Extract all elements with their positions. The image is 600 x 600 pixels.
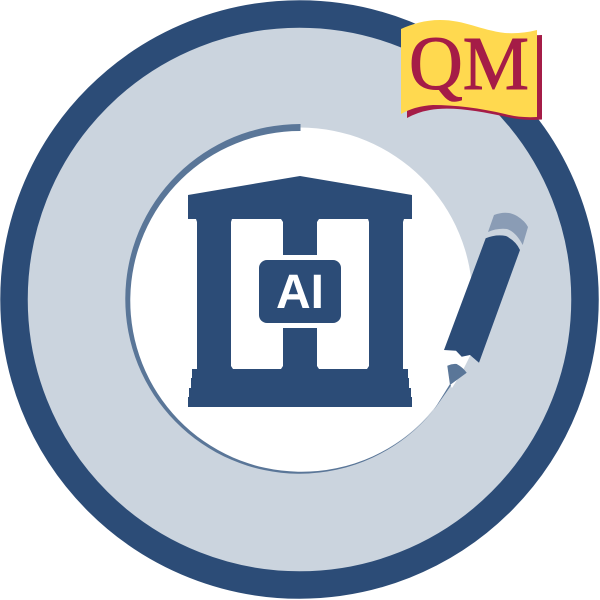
pencil tip bbox=[447, 364, 467, 385]
flag bbox=[401, 20, 537, 117]
AI label box bbox=[259, 260, 341, 323]
white notch by pencil tip bbox=[440, 350, 471, 388]
pencil line bbox=[434, 384, 451, 410]
white inner circle bbox=[128, 128, 472, 472]
pencil body bbox=[444, 235, 520, 363]
tapered arc bbox=[125, 124, 434, 474]
QM logo flag bbox=[401, 20, 542, 120]
QM letters: QM bbox=[409, 22, 529, 106]
AI label text: AI bbox=[276, 266, 324, 319]
icon: institution building with AI bbox=[188, 176, 412, 407]
icon: pencil bbox=[434, 213, 528, 410]
pencil eraser bbox=[488, 213, 528, 245]
flag shadow bbox=[407, 35, 542, 120]
